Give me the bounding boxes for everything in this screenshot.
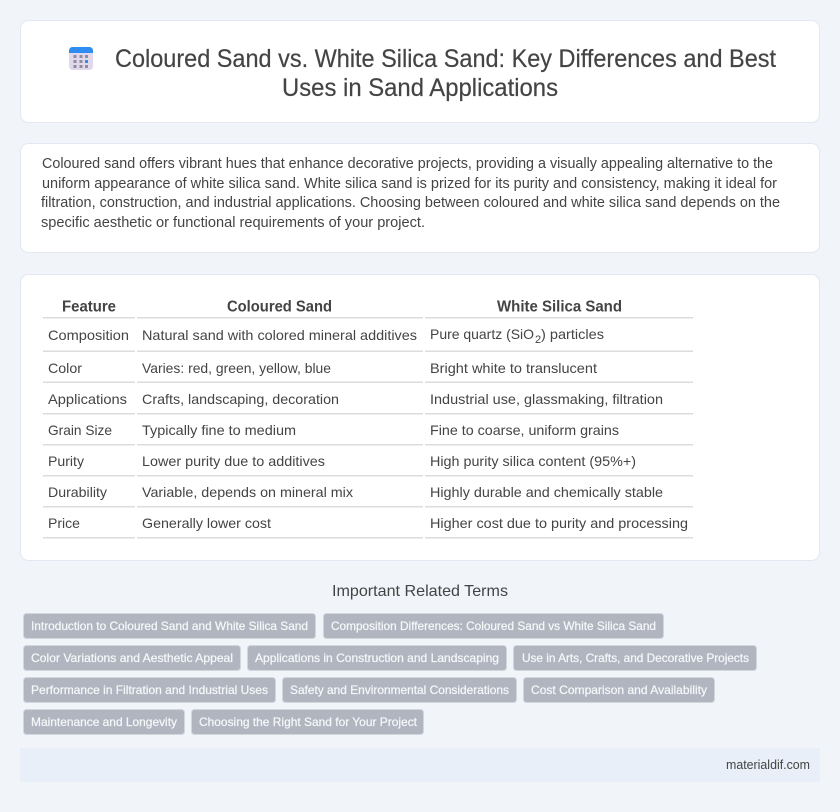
heading: important related terms: Important Related Terms — [332, 583, 508, 600]
icon: calendar — [69, 47, 93, 70]
table row: composition: Composition — [48, 327, 129, 343]
related terms tags: Use in Arts, Crafts, and Decorative Projects — [522, 651, 749, 665]
title — [115, 45, 776, 102]
table row: composition: ) particles — [541, 326, 604, 342]
related terms tags — [24, 614, 756, 734]
table header row — [43, 298, 693, 318]
title: Coloured Sand vs. White Silica Sand: Key Differences and Best — [115, 45, 776, 73]
table row: applications — [43, 391, 693, 414]
footer bar — [20, 748, 820, 782]
table row: color: Varies: red, green, yellow, blue — [142, 360, 331, 376]
text block: introduction paragraph: uniform appearance of white silica sand. White silica sand is prized for its purity and consistency, making it ideal for — [42, 176, 777, 192]
table row: color: Bright white to translucent — [430, 360, 597, 376]
related terms tags: Applications in Construction and Landscaping — [255, 651, 499, 665]
table row: price: Higher cost due to purity and processing — [430, 515, 688, 531]
table row: price: Price — [48, 515, 80, 531]
related terms tags: Safety and Environmental Considerations — [290, 683, 509, 697]
table header row: Coloured Sand — [227, 298, 332, 316]
panel: comparison table — [20, 274, 820, 560]
related terms tags: Composition Differences: Coloured Sand vs White Silica Sand — [331, 619, 656, 633]
related terms tags: Color Variations and Aesthetic Appeal — [31, 651, 233, 665]
table row: composition: 2 — [535, 334, 541, 346]
table row: durability: Highly durable and chemically stable — [430, 484, 663, 500]
related terms tags: Choosing the Right Sand for Your Project — [199, 715, 418, 729]
table row: price: Generally lower cost — [142, 515, 271, 531]
related terms tags: Cost Comparison and Availability — [531, 683, 707, 697]
text block: introduction paragraph: Coloured sand offers vibrant hues that enhance decorative projects, providing a visually appealing alternative to the — [42, 156, 773, 172]
table row: purity — [43, 453, 693, 476]
table header row: White Silica Sand — [497, 298, 622, 316]
text block: introduction paragraph — [41, 156, 780, 231]
table header row: Feature — [62, 298, 116, 316]
table row: purity: Lower purity due to additives — [142, 453, 325, 469]
footer bar: materialdif.com — [726, 757, 810, 772]
table row: grain size: Grain Size — [48, 422, 112, 438]
title: Uses in Sand Applications — [282, 74, 558, 102]
table row: applications: Industrial use, glassmaking, filtration — [430, 391, 663, 407]
table row: grain size: Fine to coarse, uniform grains — [430, 422, 619, 438]
related terms tags: Introduction to Coloured Sand and White Silica Sand — [31, 619, 308, 633]
text block: introduction paragraph: specific aesthetic or functional requirements of your project. — [41, 215, 425, 231]
panel: title card — [20, 20, 820, 122]
table row: composition: Pure quartz (SiO — [430, 326, 534, 342]
table row: durability: Durability — [48, 484, 107, 500]
table row: grain size: Typically fine to medium — [142, 422, 296, 438]
panel: introduction — [20, 144, 820, 252]
table row: durability — [43, 484, 693, 508]
table row: color — [43, 360, 693, 383]
table row: price — [43, 515, 693, 538]
table row: grain size — [43, 422, 693, 446]
table row: purity: High purity silica content (95%+) — [430, 453, 636, 469]
table row: applications: Crafts, landscaping, decoration — [142, 391, 339, 407]
table row: composition: Natural sand with colored mineral additives — [142, 327, 417, 343]
table row: composition — [43, 326, 693, 352]
table row: color: Color — [48, 360, 82, 376]
related terms tags: Performance in Filtration and Industrial Uses — [31, 683, 268, 697]
text block: introduction paragraph: filtration, construction, and industrial applications. Choosing between coloured and white silica sand depends on the — [41, 195, 780, 211]
table row: applications: Applications — [48, 391, 127, 407]
table row: durability: Variable, depends on mineral mix — [142, 484, 353, 500]
table row: purity: Purity — [48, 453, 84, 469]
related terms tags: Maintenance and Longevity — [31, 715, 177, 729]
